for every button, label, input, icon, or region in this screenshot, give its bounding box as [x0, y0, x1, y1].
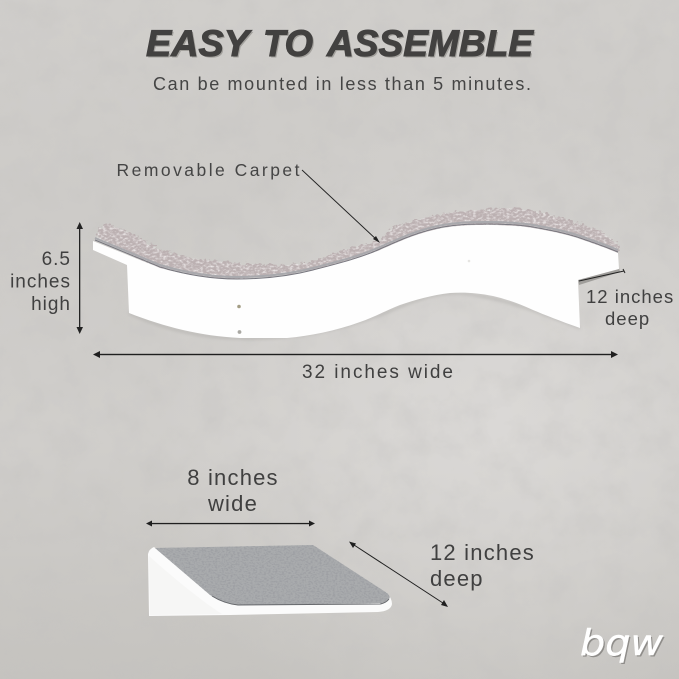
pad front edge — [212, 596, 389, 605]
subtitle: Can be mounted in less than 5 minutes. — [153, 74, 531, 94]
silver tray band — [95, 222, 618, 277]
title: TO — [263, 23, 313, 64]
title — [146, 23, 536, 66]
small shelf width label: wide — [207, 491, 258, 516]
dark front edge of carpet tray — [95, 224, 618, 279]
small shelf depth arrow — [349, 542, 448, 607]
wavy wall shelf — [93, 208, 620, 338]
shelf depth label: deep — [605, 308, 650, 329]
removable carpet label: Removable Carpet — [116, 160, 300, 180]
shelf underside shadow tab — [578, 268, 620, 285]
small shelf width label — [187, 465, 279, 516]
title: EASY — [148, 24, 254, 66]
height dimension arrow — [76, 222, 83, 334]
width dimension arrow — [93, 351, 618, 358]
height label — [10, 249, 71, 315]
shelf shadow — [129, 293, 580, 338]
small shelf width label: 8 inches — [187, 465, 279, 490]
small shelf width arrow — [146, 520, 315, 526]
title: ASSEMBLE — [327, 24, 536, 66]
title: EASY — [146, 23, 252, 64]
shelf depth line — [579, 269, 625, 281]
fuzzy carpet — [97, 208, 618, 280]
brand logo: bqw — [580, 623, 664, 664]
small square shelf — [148, 545, 392, 616]
leader arrow to carpet — [302, 170, 380, 243]
small shelf depth label — [430, 540, 535, 591]
brand logo: bqw — [582, 624, 665, 666]
mounting screw holes — [237, 260, 470, 334]
grey felt pad — [155, 545, 390, 605]
height label: high — [31, 294, 71, 315]
height label: 6.5 — [42, 249, 71, 270]
small shelf depth label: deep — [430, 566, 484, 591]
small shelf depth label: 12 inches — [430, 540, 535, 565]
width label: 32 inches wide — [302, 362, 454, 383]
white bracket and base — [148, 547, 392, 616]
shelf depth label — [586, 286, 674, 329]
title: ASSEMBLE — [326, 23, 534, 64]
bracket shading — [149, 556, 222, 615]
title: TO — [264, 24, 315, 66]
height label: inches — [10, 272, 71, 292]
shelf depth label: 12 inches — [586, 286, 674, 307]
white shelf body — [93, 225, 619, 338]
